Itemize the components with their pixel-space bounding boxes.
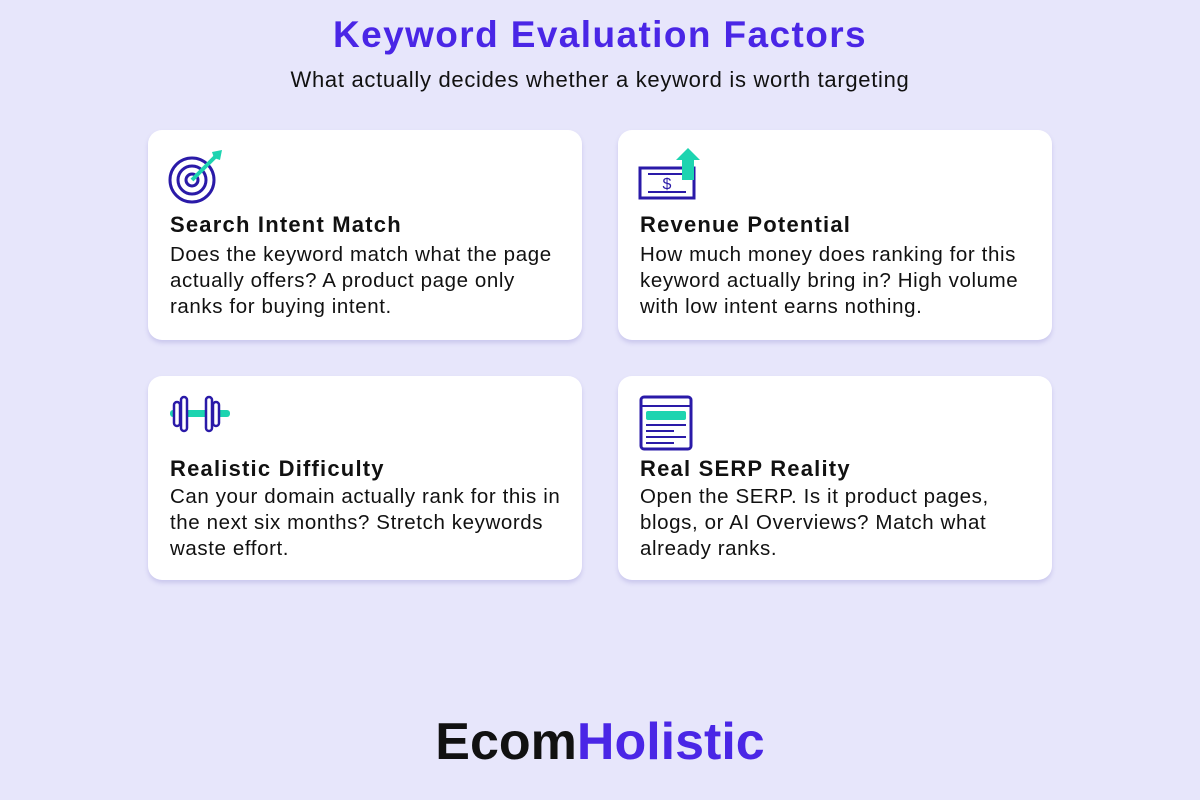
text: waste effort. — [170, 537, 289, 560]
text: already ranks. — [640, 537, 777, 560]
text — [170, 485, 560, 560]
icon: target — [168, 150, 222, 204]
heading: Realistic Difficulty — [170, 456, 385, 481]
heading: Search Intent Match — [170, 212, 402, 237]
heading: Real SERP Reality — [640, 456, 851, 481]
text: keyword actually bring in? High volume — [640, 269, 1018, 292]
logo: EcomHolistic — [435, 713, 765, 771]
text: ranks for buying intent. — [170, 295, 392, 318]
text — [640, 485, 989, 560]
icon: money arrow — [638, 148, 700, 200]
heading: Revenue Potential — [640, 212, 851, 237]
panel: revenue — [618, 130, 1052, 340]
text: blogs, or AI Overviews? Match what — [640, 511, 986, 534]
icon: money arrow: $ — [663, 176, 672, 193]
text: Does the keyword match what the page — [170, 243, 552, 266]
panel: serp — [618, 376, 1052, 580]
text: Open the SERP. Is it product pages, — [640, 485, 989, 508]
text: the next six months? Stretch keywords — [170, 511, 543, 534]
subtitle: What actually decides whether a keyword is worth targeting — [290, 67, 910, 92]
panel: difficulty — [148, 376, 582, 580]
title: Keyword Evaluation Factors — [333, 14, 867, 55]
text — [640, 243, 1018, 318]
text: with low intent earns nothing. — [640, 295, 922, 318]
text: actually offers? A product page only — [170, 269, 515, 292]
icon: browser — [640, 396, 692, 450]
text — [170, 243, 552, 318]
panel: search intent — [148, 130, 582, 340]
text: Can your domain actually rank for this in — [170, 485, 560, 508]
icon: dumbbell — [170, 396, 230, 432]
text: How much money does ranking for this — [640, 243, 1016, 266]
